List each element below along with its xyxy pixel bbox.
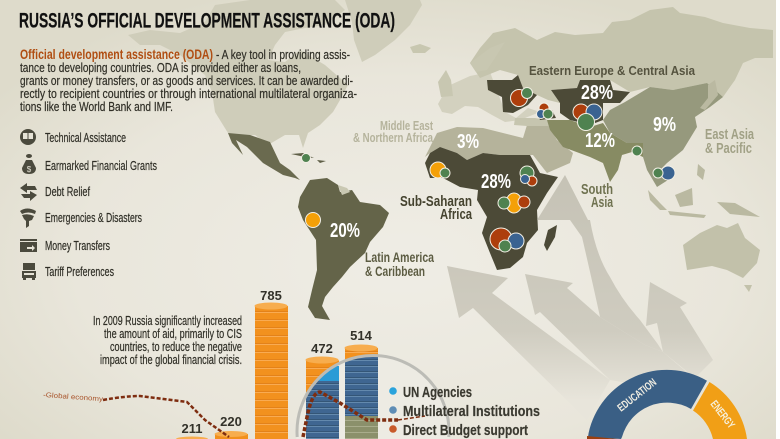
bubbles: Ukraine: [510, 88, 532, 106]
3 percent MENA: 3%: [457, 131, 479, 153]
map bubbles: [302, 88, 675, 252]
bubbles: Caucasus: [536, 103, 553, 119]
note on 2009: [93, 313, 242, 367]
label: money transfers: Money Transfers: [45, 238, 110, 253]
arrows from donut to regions: [447, 175, 713, 420]
bubbles: West Africa: [430, 162, 450, 178]
label: emergencies: Emergencies & Disasters: [45, 210, 142, 225]
icon: technical assistance: [20, 129, 36, 145]
arrow to East Asia: [646, 282, 713, 378]
global economy trend line: [43, 392, 425, 437]
label: Eastern Europe and Central Asia: Eastern Europe & Central Asia: [529, 63, 696, 78]
title: RUSSIA’S OFFICIAL DEVELOPMENT ASSISTANCE (ODA): [19, 10, 395, 32]
segment: energy: [693, 382, 747, 439]
label: Middle East and Northern Africa: Middle East: [380, 118, 433, 133]
arrow to Latin America: [447, 266, 610, 420]
label: tariff preferences: Tariff Preferences: [45, 264, 114, 279]
intro line 1: - A key tool in providing assis-: [216, 47, 350, 62]
bubbles: Central Africa: [498, 193, 530, 213]
20 percent Latin America: 20%: [330, 220, 360, 242]
region labels: [353, 63, 754, 279]
icon: money bag: [22, 154, 36, 174]
label: South Asia: [581, 181, 613, 211]
segment: brown: [587, 436, 618, 439]
Madagascar: [544, 225, 557, 251]
East Asia: [603, 83, 723, 187]
icon: truck: [22, 263, 36, 280]
Greenland: [345, 0, 422, 62]
channel legend: [389, 384, 540, 439]
note line 4: impact of the global financial crisis.: [100, 352, 242, 367]
trend line left: [103, 396, 229, 437]
label: Latin America and Caribbean: [365, 249, 434, 279]
label: South Asia: Asia: [591, 194, 613, 211]
lens interior: [296, 355, 450, 439]
intro highlighted term: Official development assistance (ODA): [20, 47, 213, 62]
legend: multilateral: Multilateral Institutions: [403, 403, 540, 420]
intro text block: [20, 47, 357, 114]
bubbles: Central Asia: [573, 104, 602, 130]
label: East Asia and Pacific: [705, 126, 754, 157]
9 percent East Asia: 9%: [653, 114, 676, 136]
intro line 4: rectly to recipient countries or through international multilateral organiza-: [20, 86, 357, 101]
aid type legend: [20, 129, 157, 280]
bar 220: 220: [220, 414, 242, 429]
bar 514: [344, 328, 378, 439]
label: education: EDUCATION: [615, 377, 659, 414]
segment: education: [588, 370, 707, 439]
Turkey: [514, 118, 550, 126]
note line 3: countries, to reduce the negative: [110, 339, 242, 354]
Russia and northern Eurasia: [470, 7, 773, 103]
trend line in lens: [303, 392, 398, 437]
Scandinavia and UK: [438, 64, 476, 97]
label: South Asia: South: [581, 181, 613, 198]
bar 211: [176, 421, 208, 439]
lens ring: [297, 355, 449, 437]
label: East Asia and Pacific: & Pacific: [705, 140, 752, 157]
South Asia: [547, 120, 643, 182]
bubble: Bangladesh: [632, 146, 642, 156]
legend: UN agencies: [389, 384, 472, 401]
bar 514: 514: [350, 328, 373, 343]
label: Sub-Saharan Africa: [400, 194, 473, 223]
label: Sub-Saharan Africa: Africa: [440, 207, 473, 223]
coin stack chart: [176, 288, 378, 439]
icon: debt relief arrows: [20, 183, 37, 201]
label: global economy: -Global economy: [43, 392, 104, 403]
label: earmarked grants: Earmarked Financial Grants: [45, 158, 157, 173]
Australia: [683, 223, 760, 292]
bar 220: [214, 414, 248, 439]
magnifier breakdown: [296, 352, 450, 439]
legend: UN agencies: UN Agencies: [403, 384, 472, 401]
label: Middle East and Northern Africa: [353, 118, 434, 145]
bar 472: 472: [311, 341, 333, 356]
icon: money transfer: [20, 239, 37, 252]
world map: [128, 0, 773, 320]
label: Middle East and Northern Africa: & Northern Africa: [353, 130, 434, 145]
label: East Asia and Pacific: East Asia: [705, 126, 754, 143]
bubbles: Southeast Asia: [653, 166, 675, 180]
icon: money bag: $: [27, 165, 32, 174]
Middle East and North Africa: [425, 123, 573, 173]
28 percent Africa: 28%: [481, 171, 511, 193]
label: Sub-Saharan Africa: Sub-Saharan: [400, 194, 472, 210]
trend line right: [398, 416, 425, 420]
bar 785: 785: [260, 288, 282, 303]
bubble: Caribbean: [302, 154, 310, 162]
Caucasus: [540, 110, 556, 120]
Sub-Saharan Africa: [425, 147, 558, 270]
12 percent South Asia: 12%: [585, 130, 615, 152]
bar 472: [306, 341, 339, 439]
bubbles: East Africa: [520, 166, 537, 186]
Mexico and Central America: [228, 133, 300, 180]
Indonesia and Pacific islands: [648, 164, 760, 218]
Central Asia: [551, 80, 630, 125]
bar 785: [254, 288, 288, 439]
label: Latin America and Caribbean: & Caribbean: [365, 263, 425, 279]
arrow to Sub-Saharan Africa: [525, 274, 690, 385]
label: debt relief: Debt Relief: [45, 184, 90, 199]
icon: tornado: [20, 208, 36, 228]
sector donut: [587, 370, 747, 439]
Iceland: [410, 44, 431, 53]
intro line 3: grants or money transfers, or as goods and services. It can be awarded di-: [20, 73, 353, 88]
South America: [298, 178, 389, 320]
North America: [128, 0, 348, 148]
Caribbean islands: [291, 153, 326, 163]
note line 2: the amount of aid, primarily to CIS: [104, 326, 242, 341]
bubble: Peru: [306, 212, 320, 228]
intro line 2: tance to developing countries. ODA is provided either as loans,: [20, 60, 301, 75]
arrow to South Asia: [537, 175, 663, 352]
28 percent Central Asia: 28%: [581, 82, 613, 104]
bar 211: 211: [182, 421, 202, 436]
magnified coin stacks: [306, 352, 378, 439]
intro line 5: tions like the World Bank and IMF.: [20, 99, 173, 114]
region percentages: [330, 82, 676, 242]
Guyana light patch: [338, 185, 350, 195]
Europe: [438, 72, 540, 122]
Ukraine: [487, 75, 537, 113]
note line 1: In 2009 Russia significantly increased: [93, 313, 242, 328]
legend: direct budget: Direct Budget support: [403, 422, 528, 439]
label: technical assistance: Technical Assistance: [45, 130, 126, 145]
label: Latin America and Caribbean: Latin America: [365, 249, 434, 265]
Japan: [700, 80, 718, 110]
bubbles: Southern Africa: [490, 228, 524, 252]
